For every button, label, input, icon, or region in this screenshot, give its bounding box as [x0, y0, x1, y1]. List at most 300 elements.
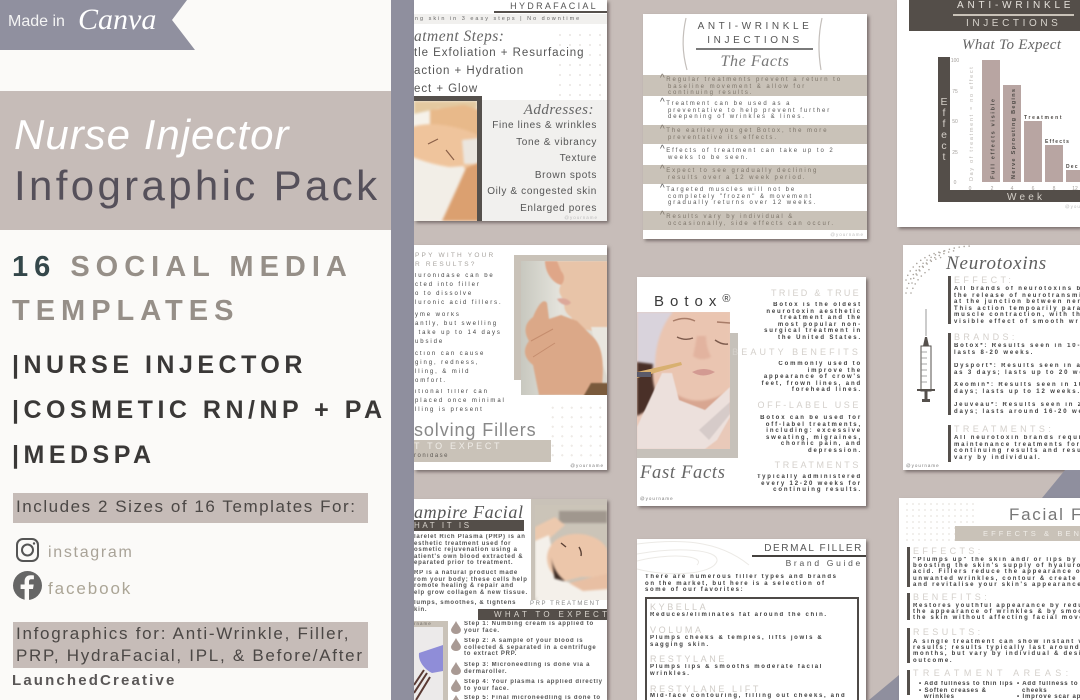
- brand name: LaunchedCreative: [12, 672, 176, 689]
- body: treatment and the: [780, 315, 862, 321]
- step text: Step 3: Microneedling is done via a: [464, 662, 590, 668]
- section: results: RESULTS:: [913, 627, 984, 637]
- body text 1: o to dissolve: [415, 290, 473, 296]
- topics text: [16, 624, 364, 665]
- prp text: romote healing & repair and: [414, 583, 514, 589]
- bar: results: [907, 628, 910, 663]
- panel: dermal filler guide card: [637, 539, 866, 700]
- what it is text: esthetic treatment used for: [414, 541, 511, 547]
- icon: facebook: [13, 571, 42, 600]
- effect text: [954, 286, 1080, 324]
- bar: treatment areas: [907, 670, 910, 695]
- y ticks: 25: [952, 150, 958, 156]
- icon: instagram: [16, 538, 39, 562]
- body: Botox can be used for: [760, 415, 862, 421]
- fact text: occasionally, side effects can occur.: [668, 220, 835, 226]
- body: neurotoxin aesthetic: [766, 308, 862, 314]
- prp text: rom your body; these cells help: [414, 577, 528, 583]
- y ticks: 0: [954, 180, 957, 186]
- handle: @yourname: [564, 215, 598, 220]
- section: tried and true: TRIED & TRUE: [771, 288, 861, 298]
- brands text: [954, 402, 1080, 414]
- fact 6: gradually returns over 12 weeks.: [668, 200, 817, 206]
- topics text: PRP, HydraFacial, IPL, & Before/After: [16, 646, 364, 665]
- body text 2: ubside: [415, 338, 444, 344]
- x ticks: [969, 186, 1078, 192]
- y axis title: t: [943, 151, 946, 163]
- step text: [464, 621, 594, 634]
- subtitle: ng skin in 3 easy steps | No downtime: [415, 16, 581, 22]
- body: [757, 474, 862, 493]
- kybella text: Reduces/eliminates fat around the chin.: [650, 612, 828, 618]
- heading: dissolving fillers: solving Fillers: [414, 420, 537, 440]
- effects text: [913, 557, 1080, 588]
- heading: social media templates: TEMPLATES: [12, 295, 239, 327]
- treatments text: maintenance treatments for: [954, 442, 1080, 448]
- subtitle line 2: ronidase: [414, 453, 449, 459]
- fact 7: [643, 211, 867, 230]
- heading: vampire facial: ampire Facial: [414, 502, 524, 522]
- subtitle: the facts: The Facts: [721, 53, 789, 70]
- fact text: results over a 12 week period.: [668, 174, 807, 180]
- step text: [464, 679, 603, 692]
- bar: effects: [907, 547, 910, 587]
- audience: medspa: |MEDSPA: [12, 441, 156, 469]
- what to expect band: [478, 609, 607, 620]
- treatments text: vary by individual.: [954, 454, 1042, 460]
- body: appearance of crow's: [764, 374, 862, 380]
- chart: effect by week: [938, 57, 1080, 209]
- body text 3: [415, 350, 485, 384]
- icon: drop: [451, 695, 461, 700]
- x axis title: Week: [1007, 192, 1045, 203]
- what it is text: larelet Rich Plasma (PRP) is an: [414, 534, 526, 540]
- body text 3: ging, redness,: [415, 360, 479, 366]
- question heading: [415, 252, 495, 268]
- body text 4: placed once minimal: [415, 398, 506, 404]
- dot pattern: [904, 501, 974, 541]
- body: depression.: [808, 448, 862, 454]
- fact 6: completely "frozen" & movement: [668, 194, 813, 200]
- intro text: some of our favorites:: [645, 587, 744, 593]
- title band: [0, 91, 391, 230]
- areas left column: [919, 681, 1014, 700]
- header line 1: ANTI-WRINKLE: [957, 0, 1074, 11]
- section: effect: EFFECT:: [954, 275, 1014, 285]
- rotated note: Day of treatment = no effect: [969, 65, 975, 181]
- x ticks: 0: [969, 186, 972, 192]
- y ticks: 100: [951, 58, 959, 64]
- handle: rname: [414, 621, 432, 626]
- heading: social media templates: [12, 251, 353, 327]
- addresses list: Oily & congested skin: [487, 186, 597, 197]
- addresses list: Fine lines & wrinkles: [492, 120, 597, 131]
- panel: botox fast facts card: [637, 277, 866, 506]
- photo backing: [637, 333, 738, 458]
- voluma text: Plumps cheeks & temples, lifts jowls &: [650, 635, 823, 641]
- restylane: RESTYLANE: [650, 654, 727, 664]
- treatment steps: tle Exfoliation + Resurfacing: [414, 47, 584, 59]
- fact 6: ^Targeted muscles will not be: [660, 183, 796, 194]
- effects text: acid. Fillers reduce the appearance of: [913, 569, 1080, 575]
- bar labels: [990, 88, 1079, 179]
- body: improve the: [808, 368, 862, 374]
- body: Commonly used to: [778, 361, 862, 367]
- body text 4: itional filler can: [415, 388, 489, 394]
- what it is band: [414, 520, 524, 531]
- step text: Step 2: A sample of your blood is: [464, 638, 583, 644]
- fact 4: [660, 144, 835, 160]
- brands text: days; lasts up to 12 weeks.: [954, 388, 1080, 394]
- body: the United States.: [778, 334, 862, 340]
- dot pattern: [548, 403, 607, 458]
- bar labels: Dec: [1066, 164, 1079, 170]
- audience: cosmetic: |COSMETIC RN/NP + PA: [12, 396, 387, 424]
- fact text: baseline movement & allow for: [668, 84, 806, 90]
- treatments text: [954, 435, 1080, 460]
- body text 1: luronidase can be: [415, 272, 495, 278]
- canva wordmark: Canva: [78, 3, 156, 36]
- y axis title: [940, 96, 948, 163]
- body text 2: antly, but swelling: [415, 320, 498, 326]
- subheading: addresses: Addresses:: [524, 102, 594, 118]
- body: continuing results.: [773, 487, 862, 493]
- body: every 12-20 weeks for: [761, 480, 862, 486]
- kybella: KYBELLA: [650, 602, 708, 612]
- panel: facial filler effects card: [899, 498, 1080, 700]
- fact text: preventative its effects.: [668, 134, 778, 140]
- section: brands: BRANDS:: [954, 332, 1018, 342]
- intro text: There are numerous filler types and brands: [645, 574, 838, 580]
- step 3: [451, 662, 607, 677]
- handle: @yourname: [570, 463, 604, 468]
- fact text: [660, 124, 829, 140]
- brands text: [954, 343, 1080, 356]
- x ticks: 12: [1072, 186, 1078, 192]
- body text 3: ction can cause: [415, 350, 485, 356]
- label: facebook: facebook: [48, 579, 132, 598]
- bar labels: Treatment: [1024, 115, 1063, 121]
- fact text: ^Regular treatments prevent a return to: [660, 73, 842, 84]
- section: benefits: BENEFITS:: [913, 592, 990, 602]
- bar: benefits: [907, 593, 910, 620]
- body: feet, frown lines, and: [762, 380, 862, 386]
- body text 2: yme works: [415, 312, 461, 318]
- addresses list: [487, 120, 597, 214]
- section: beauty benefits: BEAUTY BENEFITS: [732, 347, 861, 357]
- header band: [909, 0, 1080, 31]
- addresses list: Enlarged pores: [520, 203, 597, 214]
- icon: drop: [451, 638, 461, 651]
- addresses list: Tone & vibrancy: [516, 137, 597, 148]
- fact 4: ^Effects of treatment can take up to 2: [660, 144, 835, 155]
- fact text: ^Expect to see gradually declining: [660, 164, 818, 175]
- step text: collected & separated in a centrifuge: [464, 645, 596, 651]
- title line 2: Infographic Pack: [14, 162, 380, 209]
- prp text: RP is a natural product made: [414, 570, 518, 576]
- body: chornic pain, and: [781, 441, 862, 447]
- areas left column: • Soften creases &: [919, 688, 987, 694]
- photo: facial treatment: [414, 96, 482, 221]
- slate corner top: [1040, 470, 1080, 498]
- areas right column: [1017, 681, 1080, 700]
- panel: dissolving fillers card: [414, 245, 607, 470]
- section: treatment areas: TREATMENT AREAS:: [913, 668, 1073, 678]
- fact 2: deepening of wrinkles & lines.: [668, 114, 806, 120]
- badge: made in canva ribbon: [0, 0, 195, 50]
- fact text: continuing results.: [668, 90, 753, 96]
- heading: dermal filler: DERMAL FILLER: [764, 543, 863, 554]
- step 1: [451, 621, 607, 636]
- icon: drop: [451, 662, 461, 675]
- panel: vampire facial card: [414, 499, 607, 700]
- title: [698, 21, 812, 46]
- step text: [464, 638, 596, 658]
- panel: what to expect chart card: [897, 0, 1080, 227]
- fact 2: [660, 97, 831, 120]
- bar labels: Effects: [1045, 139, 1070, 145]
- brands text: lasts 8-20 weeks.: [954, 350, 1034, 356]
- panel: left cover: [0, 0, 391, 700]
- y ticks: 75: [952, 89, 958, 95]
- restylane text: Plumps lips & smooths moderate facial: [650, 664, 823, 670]
- prp text: [414, 570, 528, 596]
- areas left column: wrinkles: [924, 694, 955, 700]
- question heading: R RESULTS?: [415, 260, 477, 268]
- fact 4: weeks to be seen.: [668, 154, 750, 160]
- what it is text: atient's own blood extracted &: [414, 554, 523, 560]
- body text 4: lling is present: [415, 406, 484, 412]
- title: ANTI-WRINKLE: [698, 21, 812, 32]
- audience list: [12, 351, 387, 469]
- title: INJECTIONS: [707, 34, 803, 46]
- photo: botox injection: [637, 312, 730, 449]
- decorative brackets: [682, 18, 822, 70]
- x ticks: 8: [1053, 186, 1056, 192]
- brand box: [645, 597, 859, 700]
- step 4: [451, 679, 607, 694]
- body: Typically administered: [757, 474, 862, 480]
- section: treatments: TREATMENTS: [775, 460, 861, 470]
- y axis title: f: [943, 107, 946, 119]
- panel: neurotoxins card: [903, 245, 1080, 470]
- restylane lift text: Mid-face contouring, filling out cheeks, and: [650, 693, 846, 699]
- heading: botox: Botox®: [654, 293, 736, 310]
- photo: lips and hand: [521, 261, 607, 395]
- treatment steps: [414, 47, 584, 95]
- photo: facial treatment: [535, 505, 607, 600]
- prp text: elp grow collagen & new tissue.: [414, 590, 528, 596]
- photo: gloved hand: [414, 627, 443, 700]
- subtitle band: [414, 440, 551, 462]
- body text 2: take up to 14 days: [419, 330, 502, 336]
- label: instagram: instagram: [48, 544, 134, 561]
- band text: HAT IT IS: [414, 521, 472, 530]
- step text: dermaroller.: [464, 669, 507, 675]
- sizes callout: [13, 493, 368, 523]
- restylane text: wrinkles.: [650, 670, 691, 676]
- title rule: [696, 48, 813, 50]
- addresses list: Texture: [560, 153, 597, 164]
- x ticks: 6: [1032, 186, 1035, 192]
- subtitle line 1: T TO EXPECT: [414, 441, 502, 451]
- fact 6: [660, 183, 817, 206]
- subheading: brand guide: Brand Guide: [786, 558, 863, 568]
- lab photo frame: [414, 621, 448, 700]
- body: sweating, migraines,: [766, 434, 862, 440]
- step text: Step 1: Numbing cream is applied to: [464, 621, 594, 627]
- y axis title: E: [940, 96, 948, 108]
- subheading: treatment steps: atment Steps:: [414, 28, 504, 45]
- treatment steps: action + Hydration: [414, 65, 524, 77]
- body: surgical treatment in: [764, 328, 862, 334]
- fact 1: [643, 75, 867, 96]
- sizes text: Includes 2 Sizes of 16 Templates For:: [16, 497, 357, 516]
- panel: anti-wrinkle facts card: [643, 14, 867, 239]
- bar labels: Full effects visible: [990, 97, 996, 179]
- chart frame: [938, 57, 1080, 202]
- voluma: VOLUMA: [650, 625, 704, 635]
- brands text: [954, 382, 1080, 394]
- section: effects: EFFECTS:: [913, 546, 984, 556]
- step 5: [451, 695, 607, 700]
- dot pattern: [555, 30, 607, 96]
- bars: [982, 60, 1080, 182]
- body: [764, 302, 862, 340]
- areas right column: cheeks: [1022, 688, 1047, 694]
- subtitle: fast facts: Fast Facts: [640, 463, 726, 483]
- bar: brands: [948, 333, 950, 415]
- y ticks: [951, 58, 959, 186]
- audience: nurse injector: |NURSE INJECTOR: [12, 351, 307, 379]
- subtitle: what to expect: What To Expect: [962, 37, 1061, 53]
- body: [760, 415, 862, 454]
- heading: social media templates: 16 SOCIAL MEDIA: [12, 251, 353, 283]
- what it is text: eparated prior to treatment.: [414, 560, 513, 566]
- body text 2: [415, 312, 502, 344]
- fact text: ^The earlier you get Botox, the more: [660, 124, 829, 135]
- body text 3: lling, & mild: [415, 368, 470, 374]
- bar labels: Nerve Sprouting Begins: [1011, 88, 1017, 179]
- subtitle band: [955, 526, 1080, 541]
- body: most popular non-: [778, 322, 862, 328]
- fact text: [660, 164, 818, 180]
- photo frame: [531, 499, 607, 600]
- fact text: ^Results vary by individual &: [660, 210, 794, 221]
- body: off-label treatments,: [766, 422, 862, 428]
- fact 2: ^Treatment can be used as a: [660, 97, 791, 108]
- section: treatments: TREATMENTS:: [954, 424, 1054, 434]
- icon: drop: [451, 621, 461, 634]
- what it is text: [414, 534, 526, 566]
- x ticks: 4: [1011, 186, 1014, 192]
- intro text: [645, 574, 838, 594]
- body text 1: cted into filler: [415, 282, 481, 288]
- icon: syringe: [917, 309, 935, 402]
- fact 3: [643, 125, 867, 144]
- y axis title: e: [941, 129, 947, 141]
- handle: @yourname: [640, 496, 674, 501]
- handle: @yourname: [830, 232, 864, 237]
- fact text: [660, 73, 842, 96]
- header line 2: INJECTIONS: [966, 18, 1061, 29]
- fact text: [660, 210, 835, 226]
- bar: treatments: [948, 425, 950, 462]
- step text: your face.: [464, 628, 500, 634]
- body text 4: [415, 388, 506, 412]
- effects text: "Plumps up" the skin and/ or lips by: [913, 557, 1077, 563]
- y axis title: f: [943, 118, 946, 130]
- addresses panel: [482, 100, 607, 221]
- body text 3: omfort.: [415, 378, 447, 384]
- step text: [464, 662, 590, 675]
- results text: kin.: [414, 607, 427, 613]
- restylane text: [650, 664, 823, 677]
- badge text: Made in: [8, 13, 65, 30]
- subtitle band: [414, 14, 607, 24]
- areas left column: • Add fullness to thin lips: [919, 681, 1014, 687]
- results text: [414, 600, 516, 613]
- voluma text: [650, 635, 823, 648]
- handle: @yourname: [906, 463, 940, 468]
- body: forehead lines.: [792, 387, 862, 393]
- brands text: [954, 363, 1080, 376]
- band text: WHAT TO EXPECT: [494, 610, 607, 619]
- photo caption: PRP TREATMENT: [530, 601, 601, 607]
- results text: [913, 639, 1080, 664]
- x ticks: 2: [991, 186, 994, 192]
- photo frame: [514, 255, 607, 380]
- divider strip: [391, 0, 414, 700]
- fact 2: preventative to help prevent further: [668, 108, 831, 114]
- y axis title: c: [941, 140, 947, 152]
- bar: effect: [948, 276, 950, 324]
- treatment steps: ect + Glow: [414, 83, 478, 95]
- what it is text: osmetic rejuvenation using a: [414, 547, 518, 553]
- topics text: Infographics for: Anti-Wrinkle, Filler,: [16, 624, 350, 643]
- step text: to extract PRP.: [464, 651, 517, 657]
- slate corner bottom: [869, 675, 899, 700]
- header rule: [953, 14, 1074, 16]
- body: Botox is the oldest: [773, 302, 862, 308]
- title line 1: Nurse Injector: [14, 111, 289, 158]
- panel: hydrafacial card: [414, 0, 607, 221]
- body: [762, 361, 862, 393]
- benefits text: [913, 603, 1080, 622]
- step text: Step 4: Your plasma is applied directly: [464, 679, 603, 685]
- body: including: excessive: [766, 428, 862, 434]
- decorative curves: [637, 539, 757, 579]
- voluma text: sagging skin.: [650, 642, 710, 648]
- results text: lumps, smoothes, & tightens: [414, 600, 516, 606]
- dot arcs: [905, 245, 970, 294]
- card heading: HYDRAFACIAL: [510, 1, 598, 11]
- section: off-label use: OFF-LABEL USE: [758, 400, 861, 410]
- step text: to your face.: [464, 686, 509, 692]
- heading rule: [494, 11, 607, 13]
- heading: neurotoxins: Neurotoxins: [946, 253, 1047, 274]
- heading rule: [752, 555, 866, 557]
- question heading: PPY WITH YOUR: [415, 252, 495, 258]
- restylane lift: RESTYLANE LIFT: [650, 684, 761, 694]
- fact 5: [643, 165, 867, 184]
- body text 1: [415, 272, 503, 306]
- icon: drop: [451, 679, 461, 692]
- y ticks: 50: [952, 119, 958, 125]
- body text 1: luronic acid fillers.: [415, 300, 503, 306]
- addresses list: Brown spots: [535, 170, 597, 181]
- results text: outcome.: [913, 658, 953, 664]
